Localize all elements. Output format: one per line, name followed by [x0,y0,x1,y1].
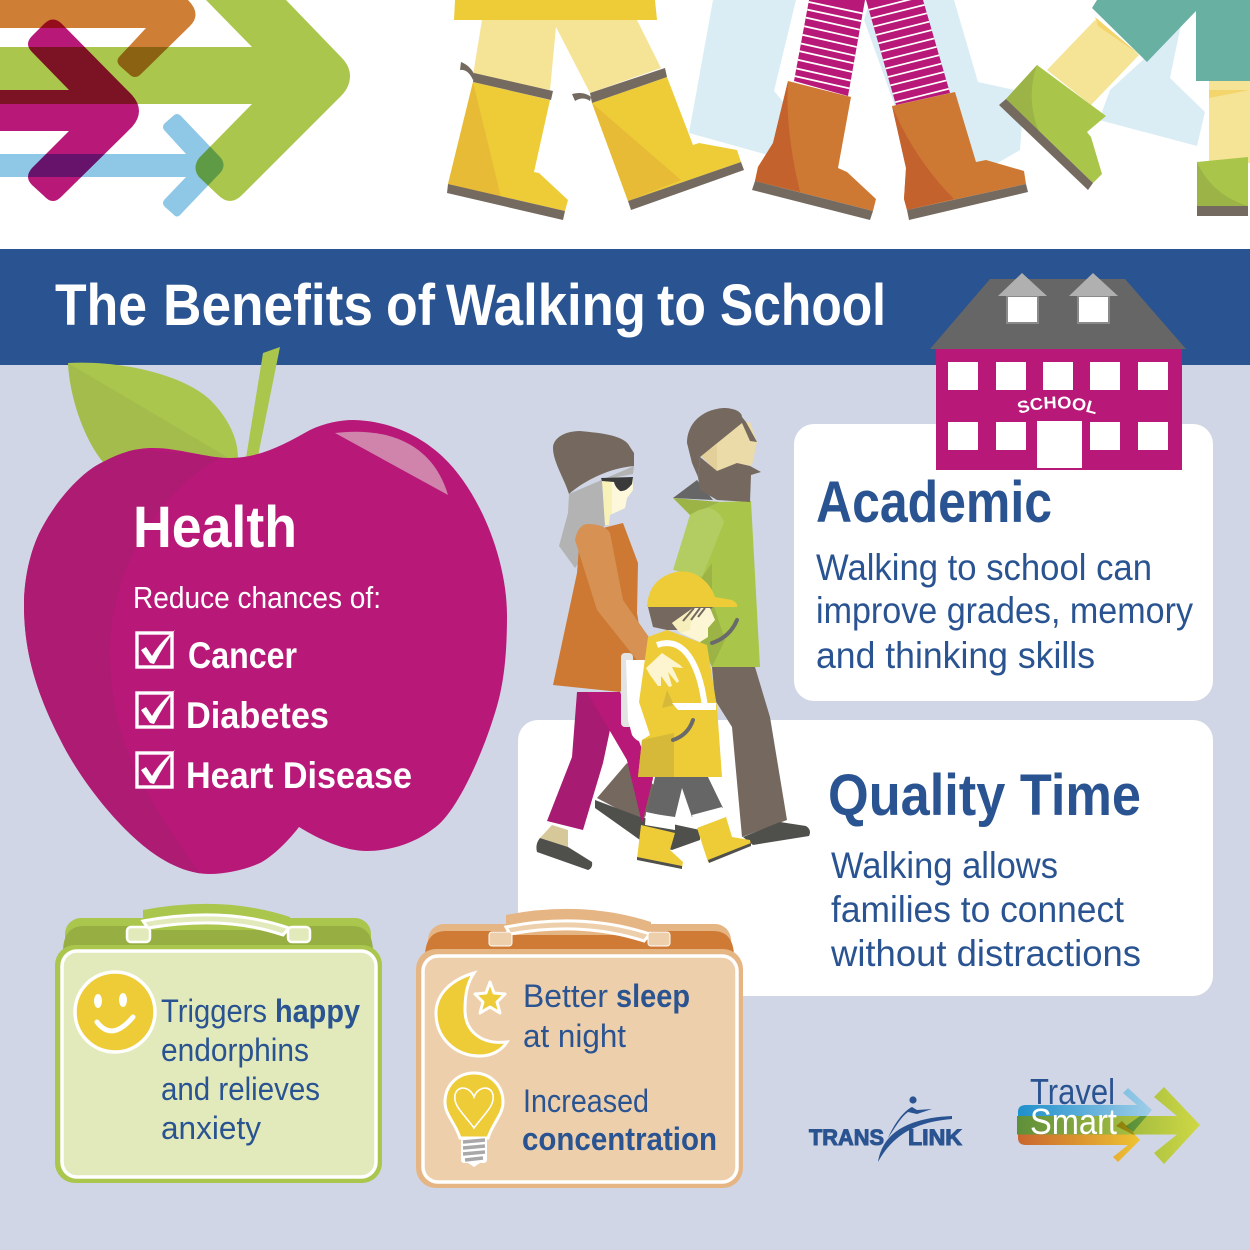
text: better sleep: at night [523,1018,626,1054]
heading: quality time: Quality Time [828,763,1141,828]
figure: man [595,408,810,850]
text: better sleep: Better [523,978,608,1014]
text: increased concentration [522,1083,717,1157]
text: quality time body: without distractions [830,933,1141,974]
text: quality time body: families to connect [831,889,1125,930]
figure: woman [536,431,660,870]
text: quality time body: Walking allows [831,845,1058,886]
text: happy endorphins [161,993,360,1146]
icon: school building [930,273,1186,470]
text: academic body: and thinking skills [816,635,1095,676]
title: Benefits [163,273,373,338]
walking legs illustration [447,0,1250,220]
checklist [137,630,412,796]
school sign: SCHOOL [1018,396,1096,414]
apple shading [24,450,222,874]
text: happy endorphins: happy [275,993,360,1029]
lunchbox lid [425,909,734,964]
checklist: Heart Disease [186,755,412,796]
text: academic body [816,547,1193,676]
text: happy endorphins: anxiety [161,1110,261,1146]
heading: academic: Academic [816,470,1052,535]
title: to [657,273,706,338]
logo text: Travel: Travel [1030,1071,1115,1112]
text: academic body: improve grades, memory [816,590,1193,631]
icon: apple stem [246,347,280,458]
panel: quality time [518,720,1213,996]
icon: light bulb [445,1073,503,1167]
checklist: Diabetes [186,695,329,736]
logo text: Smart: Smart [1030,1101,1117,1142]
panel: health apple [0,347,507,880]
title: The [55,273,147,338]
title: of [386,273,436,338]
title banner [0,249,1250,365]
panel: green lunchbox [55,904,382,1183]
logo arrows [1017,1087,1200,1164]
icon: moon and star [436,973,507,1056]
title [55,273,886,338]
heading: health: Health [133,495,297,560]
icon: woman's hand [646,653,683,687]
figure: teal coat and green boots [999,0,1250,216]
icon: apple body [24,420,507,874]
text: reduce chances of: Reduce chances of: [133,580,381,615]
icon: apple leaf [68,363,238,470]
text: academic body: Walking to school can [816,547,1152,588]
text: increased concentration: concentration [522,1121,717,1157]
title: School [720,273,886,338]
text: quality time body [830,845,1141,974]
lunchbox lid [63,904,373,958]
figure: striped tights and orange boots [752,0,1028,220]
logo: TransLink [809,1096,962,1162]
logo: TransLink: TRANS [809,1125,884,1150]
text: happy endorphins: endorphins [161,1032,309,1068]
text: increased concentration: Increased [523,1083,649,1119]
text: happy endorphins: Triggers [161,993,267,1029]
illustration: walking family [536,408,810,870]
figure: yellow boots [447,0,744,220]
white top strip [0,0,1250,249]
panel: academic [794,424,1213,701]
figure: child [621,571,751,869]
logo: TransLink: LINK [908,1125,962,1150]
logo: Travel Smart [1017,1071,1200,1164]
text: better sleep: sleep [616,978,690,1014]
text: happy endorphins: and relieves [161,1071,320,1107]
figure: pale blue trousers behind [689,0,1205,178]
text: better sleep [523,978,690,1054]
title: Walking [446,273,646,338]
checklist: Cancer [188,635,297,676]
panel: orange lunchbox [416,909,743,1188]
decorative arrows [0,0,350,216]
icon: smiley [75,972,155,1052]
apple highlight [335,432,448,495]
